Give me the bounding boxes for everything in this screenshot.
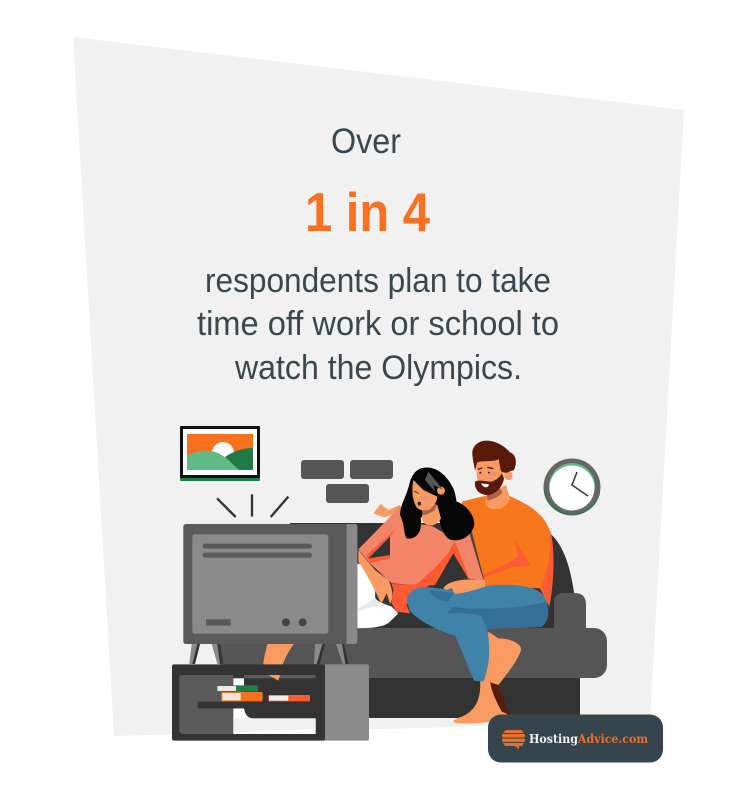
white box on shelf [233,678,244,686]
woman: red shadow [367,528,468,587]
woman: sweater [358,507,483,585]
woman: forearm and hand [358,550,392,604]
man: raised foot [483,632,521,685]
text block: statistic description: time off work or school to [197,305,559,343]
woman: sofa gap under arm [368,537,467,586]
icon: framed landscape picture [180,426,260,481]
man: jeans [407,585,548,682]
tv: label plate [206,619,231,626]
man: eyes and brows [478,467,493,469]
man: face [476,460,504,495]
man: neck [485,485,510,509]
woman: neck shadow [422,503,437,515]
tv: leg shade [192,644,349,664]
tv: knobs [282,618,290,626]
tv: side panel [347,524,357,644]
heading: 1 in 4: 1 in 4 [305,181,430,243]
tv: back panel [192,534,328,634]
illustration: couple on the sofa [350,441,553,724]
woman: neck [422,505,441,526]
shelf [198,702,316,708]
leg: foot behind the tv [263,644,294,681]
stand: side [320,664,369,741]
man: smile [481,483,489,487]
man: sweater shade [483,530,553,607]
woman: red skirt [392,584,430,613]
book: green [217,685,258,692]
text block: statistic description: watch the Olympics. [234,349,522,387]
illustration: sofa [220,523,607,718]
illustration: television set [172,494,369,741]
pillow [350,563,398,628]
heading: Over: Over [331,122,401,161]
stand: see-through floor [233,708,316,734]
stand: frame [172,664,325,741]
text block: statistic description: respondents plan to take [205,262,551,300]
woman: ear [437,487,445,495]
man: lower foot [454,678,508,724]
text: logo wordmark: HostingAdvice.com [529,732,648,746]
woman: right arm [453,530,483,580]
man: neck shadow [487,488,503,500]
icon: wall clock [544,458,600,516]
tv: signal lines [217,494,288,517]
stand: see-through sofa [233,675,316,718]
decoration: wall bricks [301,460,393,503]
woman: hair [400,468,474,540]
text block: statistic description [197,262,559,387]
foot seen through shelf [268,675,280,681]
stand: left inner panel [179,675,233,734]
tv: legs [189,644,349,664]
tv: vents [203,544,312,549]
couch gap strip [468,528,484,580]
stand: floor edge [233,718,316,733]
book: orange [221,692,263,701]
tv: cabinet [183,524,357,644]
icon: logo server bubble [502,730,525,749]
man: orange sweater [462,496,553,607]
man: ear [504,471,513,480]
man: hair [472,441,516,473]
woman: features [418,502,421,506]
man: beard [475,473,504,495]
man: hand on her knee [443,579,485,594]
woman: hand on shoulder [373,504,403,517]
man: trouser shadow at heel [490,681,510,715]
woman: hair highlight [425,472,443,492]
panel: grey background [73,37,684,736]
woman: face [412,480,437,510]
book: red [268,695,310,701]
logo: HostingAdvice badge [488,714,663,762]
stand: top strip [244,675,316,678]
pillow shade [358,599,392,612]
man: jeans shade [430,590,548,629]
